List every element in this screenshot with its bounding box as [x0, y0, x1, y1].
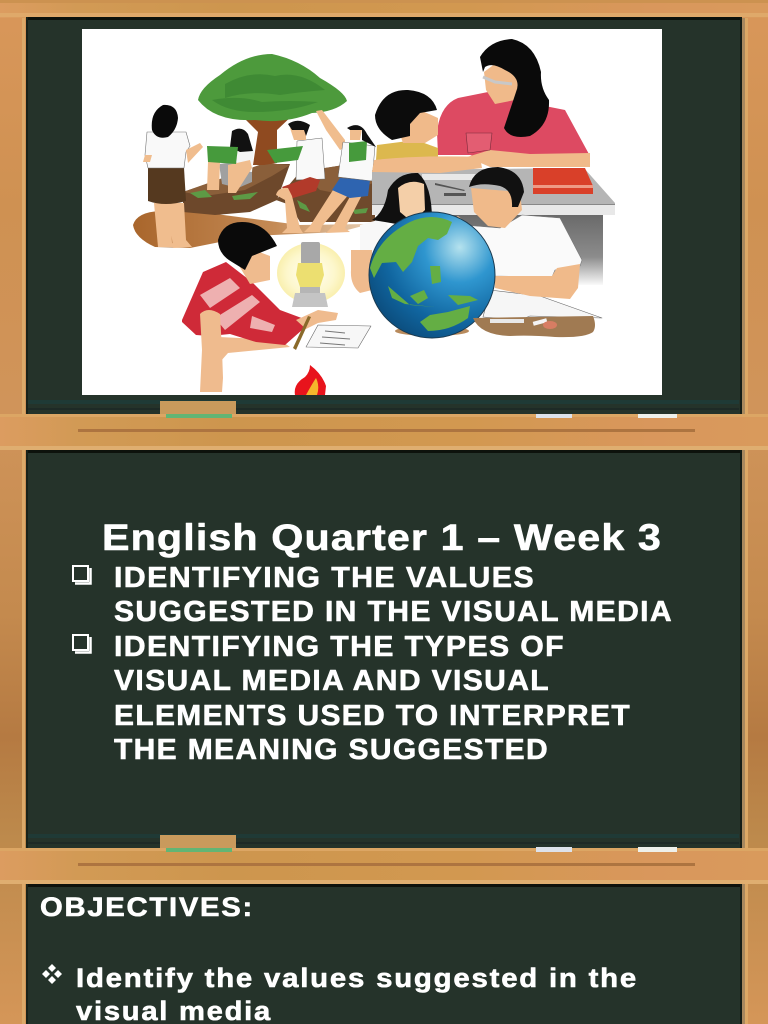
desk items on brown patch: [473, 316, 595, 337]
checkbox bullet 2: [73, 635, 90, 652]
flame logo: [295, 365, 326, 395]
reading student: [267, 121, 325, 233]
topic 2 line 2: VISUAL MEDIA AND VISUAL: [114, 665, 550, 697]
objective line 1: Identify the values suggested in the: [76, 963, 638, 993]
sitting student with book: [207, 129, 254, 193]
standing student: [143, 105, 203, 248]
lantern with glow: [277, 242, 345, 307]
topic 1 line 1: IDENTIFYING THE VALUES: [114, 562, 535, 594]
ground shadow: [133, 210, 370, 248]
eraser: second board: [160, 835, 236, 852]
objectives heading: OBJECTIVES:: [40, 892, 254, 922]
chalk pieces: second board: [536, 847, 677, 852]
chalk tray shadows: [28, 400, 739, 844]
topic 2 line 1: IDENTIFYING THE TYPES OF: [114, 631, 565, 663]
topic 1 line 2: SUGGESTED IN THE VISUAL MEDIA: [114, 596, 673, 628]
objective item: [42, 963, 638, 1024]
lesson topics list: [73, 562, 673, 766]
student leaning on desk: [372, 90, 482, 173]
boy in red robe: [182, 222, 371, 392]
student with raised arm: [304, 110, 376, 233]
student boy with book: [447, 167, 602, 320]
student girl with globe: [351, 173, 432, 293]
desk: [372, 168, 615, 285]
chalk pieces: first board: [536, 414, 677, 418]
topic 2 line 3: ELEMENTS USED TO INTERPRET: [114, 700, 631, 732]
rock mound: [183, 160, 375, 222]
checkbox bullet 1: [73, 566, 90, 584]
topic 2 line 4: THE MEANING SUGGESTED: [114, 734, 549, 766]
globe: [369, 212, 495, 338]
tree: [198, 54, 347, 165]
illustration: students learning: [82, 29, 662, 395]
teacher: [437, 39, 590, 167]
heading: English Quarter 1 – Week 3: English Quarter 1 – Week 3: [102, 516, 662, 558]
diamond bullet: [42, 964, 62, 984]
eraser: first board: [160, 401, 236, 418]
